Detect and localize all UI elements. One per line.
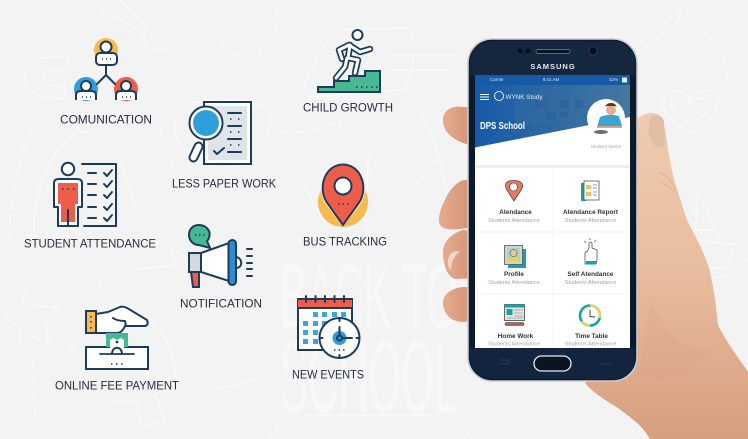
- phone bottom bezel: [470, 348, 635, 379]
- home button: [534, 356, 571, 371]
- tile: self atendance: [565, 238, 616, 286]
- label: bus tracking: BUS TRACKING: [303, 234, 387, 248]
- tile: atendance: [488, 180, 540, 224]
- tile: time table: Time Table: [575, 333, 608, 340]
- tile: profile: Students Attendance: [488, 280, 540, 286]
- status bar: [475, 75, 630, 85]
- app header: [475, 85, 630, 148]
- tile: atendance report: Students Attendance: [565, 218, 616, 224]
- label: communication: COMUNICATION: [60, 112, 152, 126]
- phone: 9:41 AM: [543, 77, 560, 82]
- label: notification: NOTIFICATION: [180, 296, 262, 310]
- screen: [475, 75, 630, 348]
- tile: atendance: Students Attendance: [488, 218, 540, 224]
- phone body: [468, 39, 637, 381]
- tile: home work: Students Attendance: [488, 342, 540, 348]
- phone: DPS School: [480, 121, 525, 132]
- icon: bus tracking: [318, 163, 368, 227]
- icon: student attendance: [54, 163, 116, 226]
- label: new events: NEW EVENTS: [292, 368, 364, 382]
- tile: home work: [488, 304, 540, 348]
- icon: less paper work: [188, 102, 251, 164]
- tile: atendance report: [563, 181, 619, 224]
- phone: WYNK Study: [506, 94, 543, 101]
- tile: self atendance: Students Attendance: [565, 280, 616, 286]
- brand: SAMSUNG: [530, 62, 576, 71]
- tile: atendance report: Atendance Report: [563, 209, 619, 216]
- phone: [468, 39, 637, 381]
- tile: profile: [488, 246, 540, 286]
- icon: child growth: [318, 30, 380, 92]
- icon: new events: [298, 296, 360, 358]
- tile: time table: Students Attendance: [565, 342, 616, 348]
- icon: online fee payment: [86, 307, 148, 369]
- text: SCHOOL: [280, 320, 457, 434]
- app grid: [475, 165, 630, 168]
- background title: back to school: [280, 246, 458, 434]
- icon: notification: [189, 225, 252, 287]
- phone: Carrier: [490, 77, 504, 82]
- hand: fingers: [439, 107, 478, 322]
- student avatar: [587, 99, 625, 137]
- label: student attendance: STUDENT ATTENDANCE: [24, 236, 156, 250]
- tile: self atendance: Self Atendance: [568, 271, 614, 278]
- tile: atendance: Atendance: [499, 209, 532, 216]
- tile: profile: Profile: [504, 271, 524, 278]
- label: less paper work: LESS PAPER WORK: [172, 176, 277, 190]
- label: online fee payment: ONLINE FEE PAYMENT: [55, 378, 179, 392]
- tile: home work: Home Work: [498, 333, 534, 340]
- phone top bezel: [470, 41, 635, 75]
- label: child growth: CHILD GROWTH: [303, 100, 393, 114]
- phone: 42%: [609, 77, 618, 82]
- text: BACK TO: [280, 246, 458, 348]
- tile: time table: [565, 306, 616, 348]
- icon: communication: [74, 38, 138, 101]
- phone: Student Name: [591, 144, 622, 150]
- hand: palm and thumb: [585, 113, 748, 439]
